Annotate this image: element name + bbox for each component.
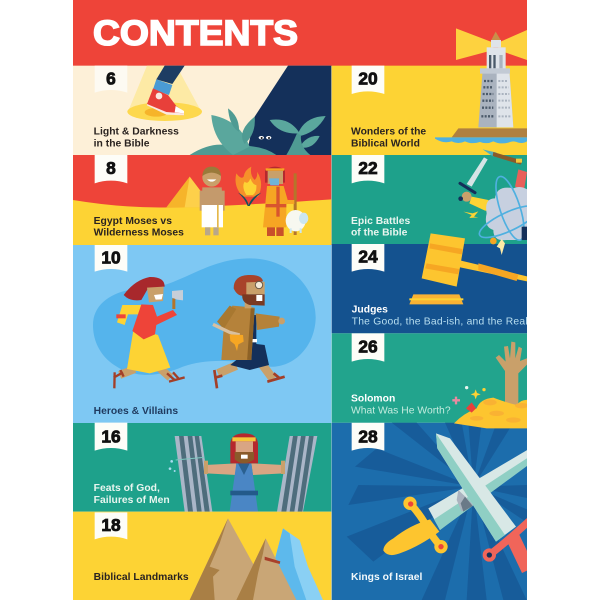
ribbon: page 26 <box>352 333 384 362</box>
panel: solomon <box>332 333 528 428</box>
icon: mountains and water <box>190 518 323 600</box>
icon: egypt moses <box>200 167 225 235</box>
panel: heroes and villains <box>73 245 331 423</box>
title: CONTENTS <box>93 14 298 53</box>
ribbon: page 28 <box>352 423 384 451</box>
icon: sneaker and jeans <box>147 66 185 115</box>
icon: sheep <box>286 210 308 233</box>
text: light and darkness label: in the Bible <box>94 139 150 150</box>
icon: spear <box>483 149 527 190</box>
panel: wonders of the biblical world <box>332 28 528 155</box>
ribbon: page 6: 6 <box>106 68 116 88</box>
ribbon: page 18: 18 <box>101 515 121 535</box>
text: egypt moses label: Egypt Moses vs <box>94 216 172 227</box>
panel: biblical landmarks <box>73 512 331 600</box>
ribbon: page 20: 20 <box>358 68 378 88</box>
panel: egypt moses vs wilderness moses <box>73 155 331 245</box>
icon: running man <box>213 275 285 388</box>
ribbon: page 16 <box>95 423 127 451</box>
panel: kings of israel <box>332 423 528 600</box>
icon: pyramid <box>166 176 200 208</box>
ribbon: page 24 <box>352 244 384 272</box>
blob background <box>93 258 316 375</box>
icon: running woman <box>114 277 185 388</box>
ribbon: page 22: 22 <box>358 158 378 178</box>
text: light and darkness label: Light & Darkness <box>94 127 179 138</box>
text: wonders label: Wonders of the <box>351 126 426 137</box>
ribbon: page 26: 26 <box>358 336 378 356</box>
icon: hand rising <box>496 342 528 407</box>
text: feats label: Failures of Men <box>94 495 170 506</box>
sunburst rays <box>347 423 528 600</box>
text: egypt moses label: Wilderness Moses <box>94 227 184 238</box>
icon: left pillars <box>169 436 212 512</box>
text: solomon label: Solomon <box>351 394 395 405</box>
icon: right pillars <box>277 436 317 512</box>
text: battles label: of the Bible <box>351 228 408 239</box>
ribbon: page 22 <box>352 155 384 183</box>
panel: judges <box>332 233 528 333</box>
ribbon: page 18 <box>95 512 127 539</box>
text: battles label: Epic Battles <box>351 216 411 227</box>
icon: coins <box>454 398 528 428</box>
ribbon: page 16: 16 <box>101 426 121 446</box>
ribbon: page 20 <box>352 66 384 94</box>
panel: header <box>73 0 527 66</box>
icon: gavel <box>409 233 528 304</box>
text: wonders label: Biblical World <box>351 138 420 149</box>
icon: leaves with eyes <box>190 108 326 155</box>
text: solomon label: What Was He Worth? <box>351 405 451 416</box>
icon: lighthouse <box>435 28 528 143</box>
text: heroes label: Heroes & Villains <box>94 406 178 417</box>
panel: epic battles <box>332 149 541 244</box>
text: kings label: Kings of Israel <box>351 572 423 583</box>
icon: red sword <box>436 433 528 570</box>
ribbon: page 6 <box>95 66 127 93</box>
ribbon: page 8: 8 <box>106 158 116 178</box>
icon: cloud and orbits <box>478 176 527 241</box>
icon: gem and sparkles <box>452 386 486 413</box>
icon: lightning and star spill <box>490 238 505 255</box>
ribbon: page 10: 10 <box>101 247 121 267</box>
icon: samson <box>204 433 285 512</box>
ribbon: page 10 <box>95 245 127 272</box>
text: landmarks label: Biblical Landmarks <box>94 572 189 583</box>
text: judges label: Judges <box>352 305 388 316</box>
icon: sword and arm <box>458 157 489 218</box>
icon: wilderness moses <box>263 167 297 236</box>
panel: light and darkness <box>73 66 331 155</box>
ribbon: page 28: 28 <box>358 426 378 446</box>
text: judges label: The Good, the Bad-ish, and the Real <box>352 316 528 327</box>
icon: yellow sword <box>383 449 528 555</box>
icon: burning bush <box>235 167 261 206</box>
text: feats label: Feats of God, <box>94 483 160 494</box>
ribbon: page 8 <box>95 155 127 183</box>
panel: feats of god <box>73 423 331 512</box>
ribbon: page 24: 24 <box>358 246 378 266</box>
